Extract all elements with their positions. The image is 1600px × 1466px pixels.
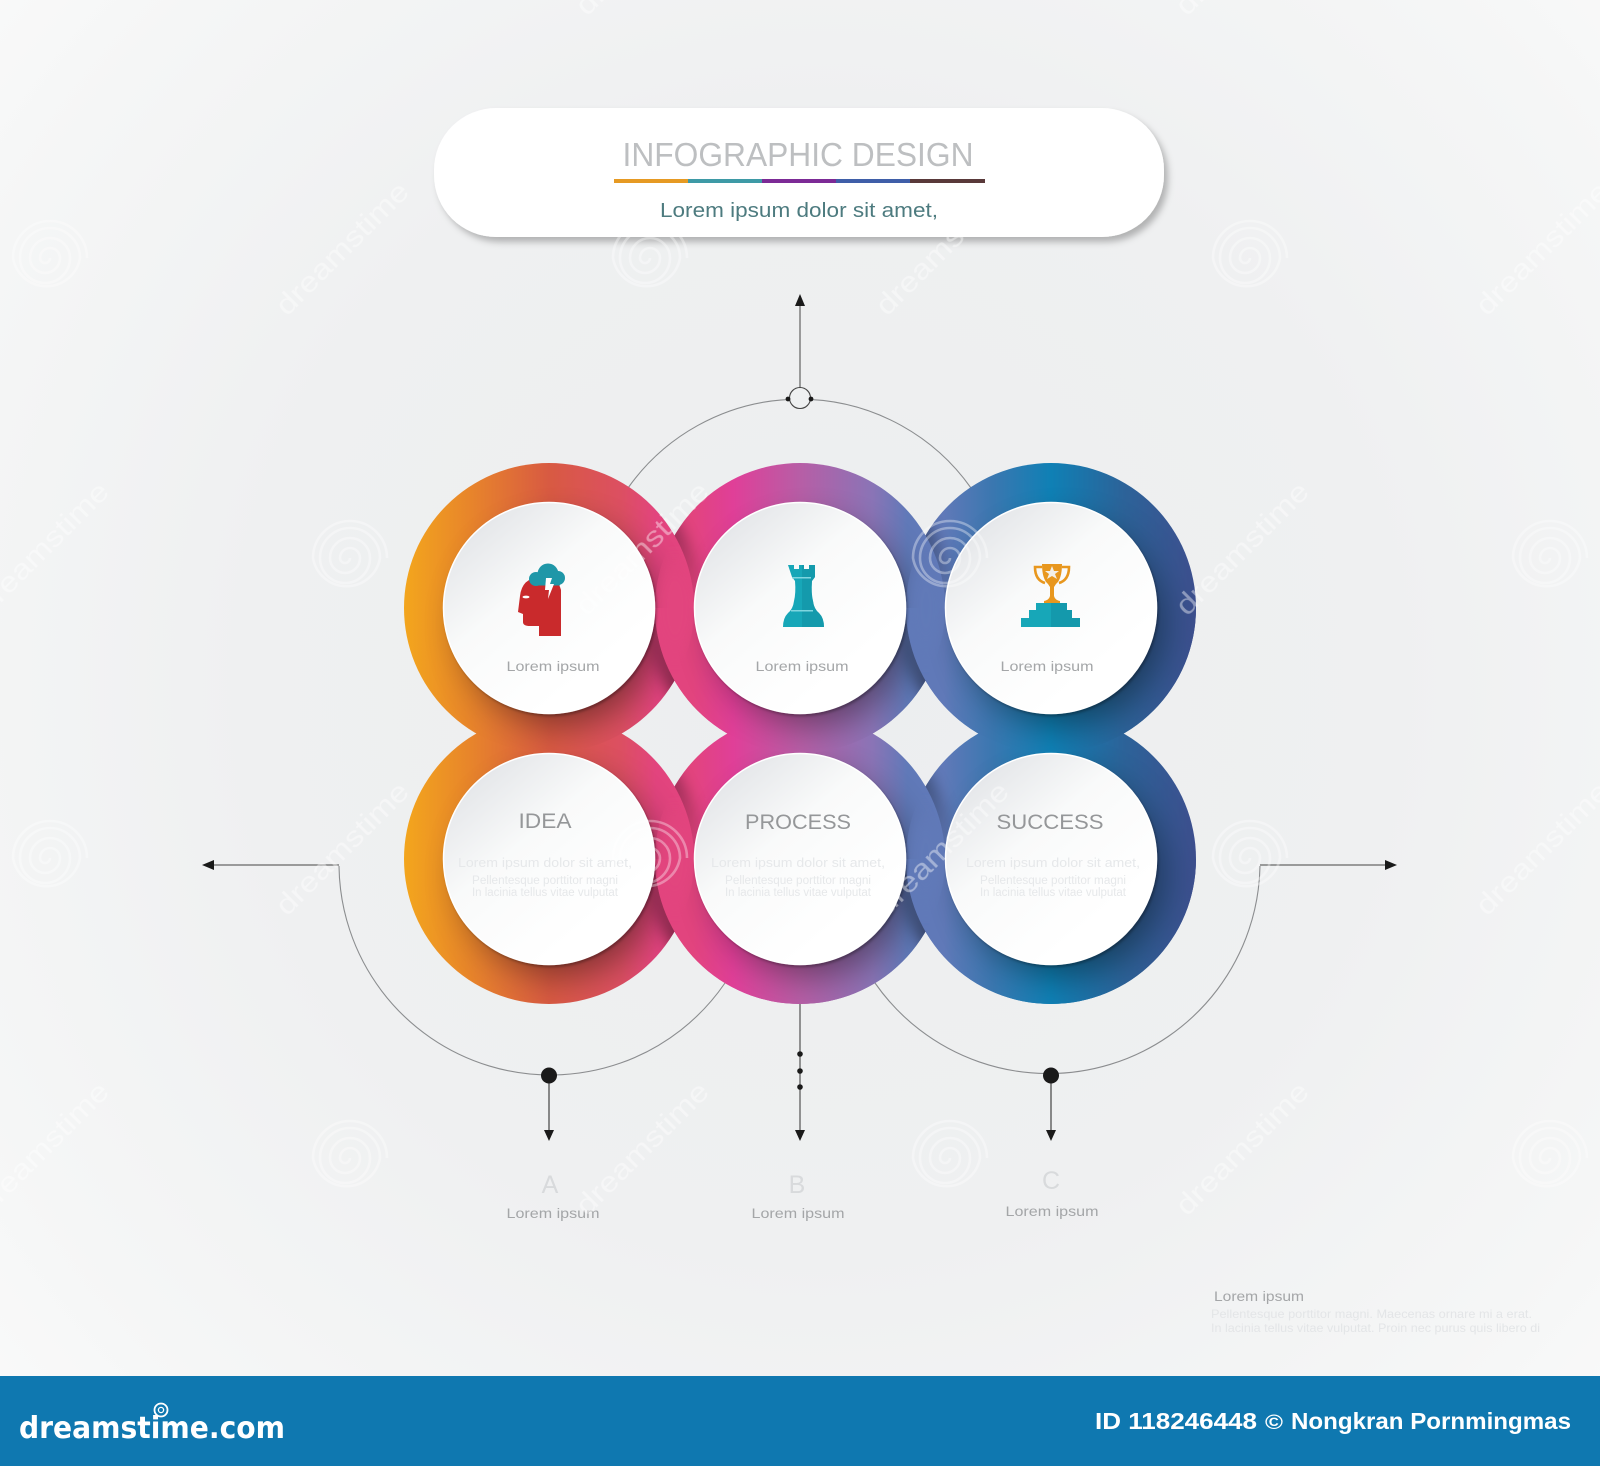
- text block: Lorem ipsum dolor sit amet,: [966, 855, 1140, 870]
- text block: In lacinia tellus vitae vulputat: [980, 887, 1127, 899]
- ring row: bottom: [404, 709, 1196, 1011]
- icon: chess rook: [783, 565, 824, 627]
- left bottom arc: [339, 866, 725, 1075]
- watermark text: dreamstime: [269, 776, 416, 922]
- text block: Lorem ipsum dolor sit amet,: [711, 855, 885, 870]
- title: INFOGRAPHIC DESIGN: [622, 136, 974, 173]
- watermark text: dreamstime: [269, 176, 416, 322]
- watermark text: dreamstime: [1469, 176, 1600, 322]
- icon: trophy on podium: [1021, 564, 1080, 627]
- text block: In lacinia tellus vitae vulputat: [472, 887, 619, 899]
- arrow: right: [1260, 860, 1397, 870]
- title pill: [434, 108, 1164, 237]
- arrow: down A: [541, 1068, 557, 1141]
- text block: [711, 855, 885, 899]
- subtitle: Lorem ipsum dolor sit amet,: [660, 199, 938, 222]
- panel: success: [946, 754, 1156, 964]
- heading: SUCCESS: [996, 811, 1104, 834]
- label A: Lorem ipsum: [506, 1205, 600, 1221]
- text block: [458, 855, 632, 899]
- heading: PROCESS: [745, 811, 851, 834]
- panel: idea: [444, 754, 654, 964]
- text block: Pellentesque porttitor magni: [472, 875, 618, 887]
- footer credit: ID 118246448: [1095, 1408, 1257, 1434]
- label C: [1006, 1167, 1098, 1219]
- watermark text: dreamstime: [869, 176, 1016, 322]
- top arc: [628, 399, 971, 488]
- note text block: Lorem ipsum: [1214, 1288, 1304, 1304]
- label A: [506, 1171, 600, 1221]
- watermark text: dreamstime: [869, 776, 1016, 922]
- text block: In lacinia tellus vitae vulputat: [725, 887, 872, 899]
- footer banner: [0, 1376, 1600, 1466]
- note text block: Pellentesque porttitor magni. Maecenas ornare mi a erat.: [1211, 1307, 1532, 1321]
- watermark spirals: [13, 221, 1587, 1186]
- panel: idea icon disc: [444, 502, 654, 714]
- label: Lorem ipsum: [1000, 658, 1094, 674]
- note text block: [1211, 1288, 1540, 1335]
- watermark text: dreamstime: [1169, 476, 1316, 622]
- text block: Pellentesque porttitor magni: [980, 875, 1126, 887]
- panel: trophy icon disc: [946, 502, 1156, 714]
- label: Lorem ipsum: [506, 658, 600, 674]
- text block: Lorem ipsum dolor sit amet,: [458, 855, 632, 870]
- label: Lorem ipsum: [756, 658, 848, 674]
- arrow: down C: [1043, 1068, 1059, 1141]
- label C: Lorem ipsum: [1006, 1203, 1098, 1219]
- panel: strategy icon disc: [694, 502, 906, 714]
- label B: Lorem ipsum: [752, 1205, 844, 1221]
- arrow: up: [786, 294, 813, 408]
- label B: B: [789, 1171, 805, 1199]
- watermark text: dreamstime: [569, 476, 716, 622]
- heading: IDEA: [518, 810, 572, 833]
- footer credit: Nongkran Pornmingmas: [1291, 1408, 1571, 1434]
- right bottom arc: [875, 866, 1260, 1074]
- footer logo: dreamstime.com: [19, 1411, 285, 1446]
- footer credit: [1095, 1408, 1571, 1434]
- text block: [966, 855, 1140, 899]
- ring row: top: [404, 458, 1196, 760]
- arrow: left: [202, 860, 339, 870]
- text block: Pellentesque porttitor magni: [725, 875, 871, 887]
- arrow: down B: [795, 1004, 805, 1141]
- note text block: In lacinia tellus vitae vulputat. Proin nec purus quis libero di: [1211, 1321, 1540, 1335]
- connector lines and arrows: [339, 399, 1260, 1075]
- watermark text: dreamstime: [569, 1076, 716, 1222]
- watermark text: dreamstime: [1169, 1076, 1316, 1222]
- label B: [752, 1171, 844, 1221]
- footer credit: ©: [1265, 1412, 1283, 1434]
- panel: process: [694, 754, 906, 964]
- label C: C: [1042, 1167, 1060, 1195]
- label A: A: [542, 1171, 559, 1199]
- icon: head with storm cloud: [518, 564, 565, 636]
- watermark text: dreamstime: [1469, 776, 1600, 922]
- colour bar: [614, 179, 985, 183]
